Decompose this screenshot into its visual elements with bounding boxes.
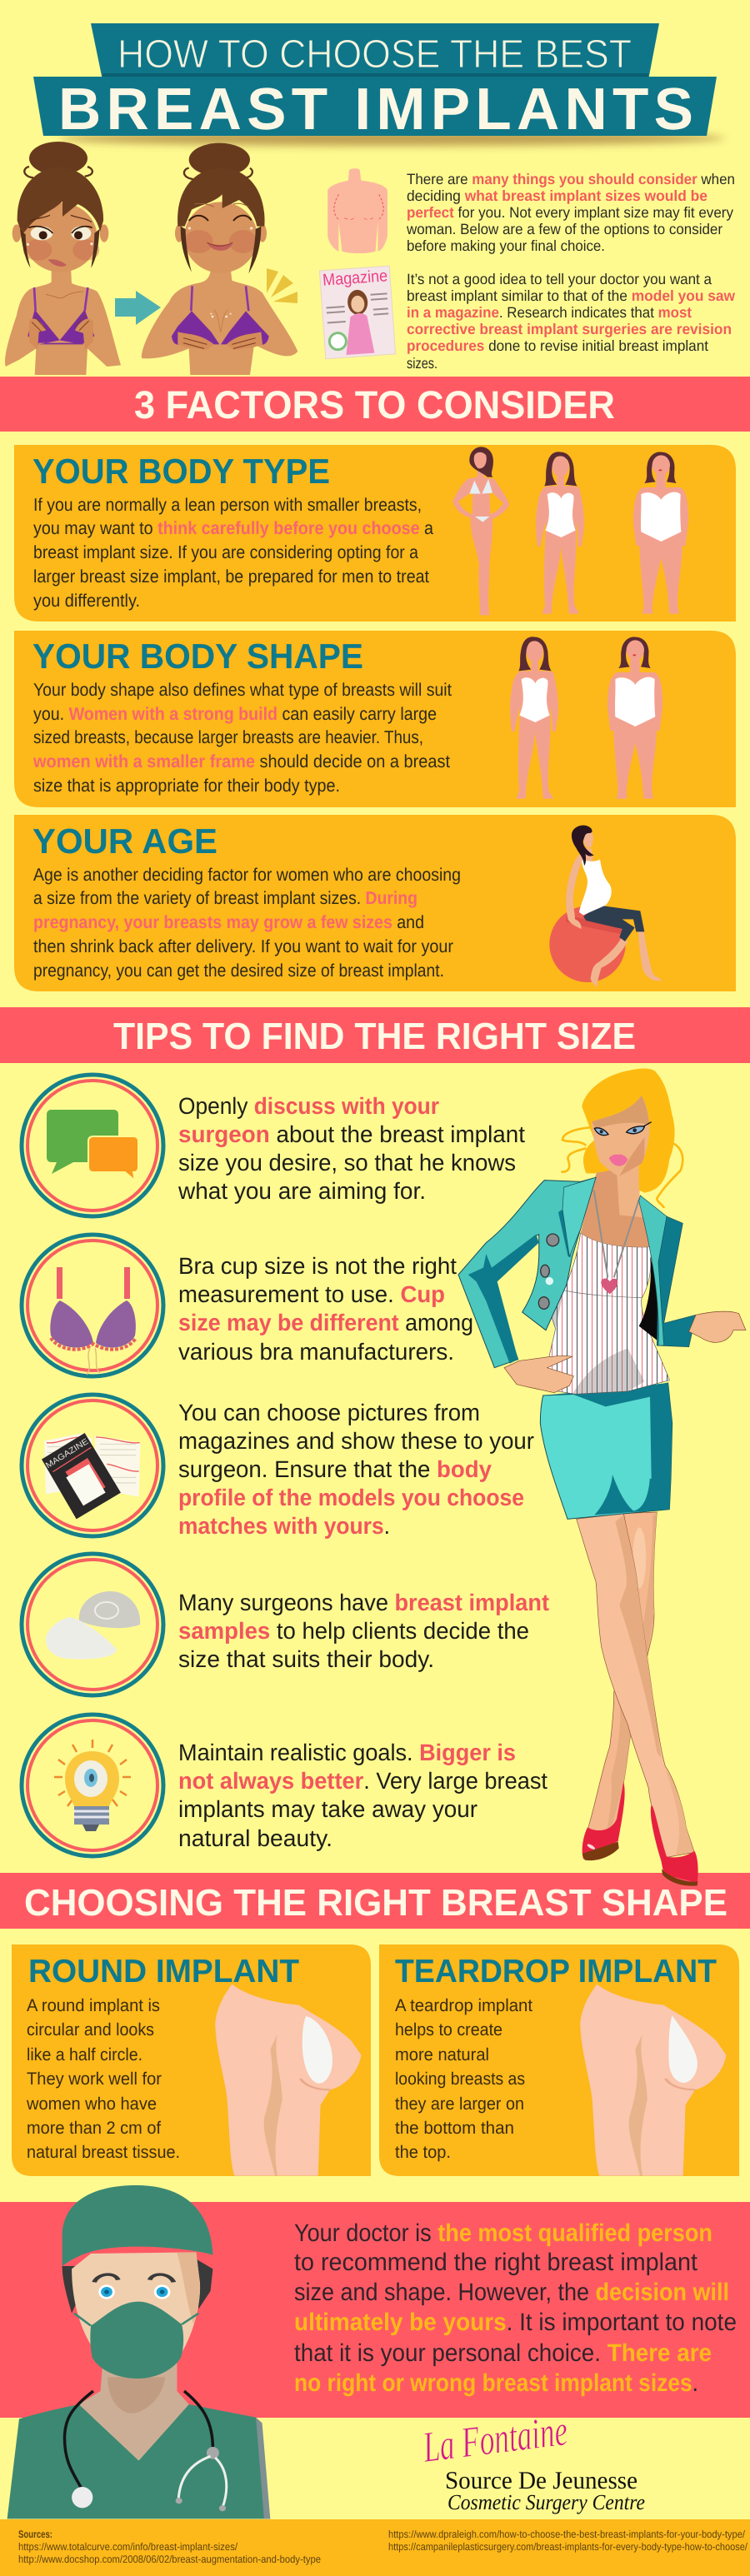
sources left: http://www.docshop.com/2008/06/02/breast-augmentation-and-body-type	[18, 2554, 321, 2565]
tip text: not always better. Very large breast	[178, 1768, 548, 1794]
intro text: sizes.	[407, 355, 438, 372]
intro text	[406, 171, 736, 372]
body text: size that is appropriate for their body type.	[33, 776, 340, 796]
tip text	[178, 1400, 534, 1539]
illustration: torso with round implant	[215, 1984, 361, 2176]
title banner	[33, 23, 725, 146]
tip text: samples to help clients decide the	[178, 1618, 529, 1644]
tip text: size you desire, so that he knows	[178, 1150, 516, 1176]
icon: torso with implant incisions	[328, 168, 388, 253]
closing text: Your doctor is the most qualified person	[294, 2219, 712, 2247]
closing band	[0, 2202, 750, 2418]
panel: round implant	[12, 1944, 371, 2176]
tip text	[178, 1093, 525, 1204]
skirt	[540, 1383, 672, 1519]
body text	[33, 495, 433, 611]
intro text: There are many things you should consider when	[407, 171, 735, 187]
body text	[32, 680, 452, 796]
body text: you may want to think carefully before you choose a	[33, 518, 433, 538]
tip 5: realistic goals	[22, 1715, 548, 1856]
body text: they are larger on	[395, 2094, 524, 2114]
heading: TEARDROP IMPLANT	[395, 1954, 717, 1989]
body text: women with a smaller frame should decide on a breast	[32, 751, 450, 771]
panel: teardrop implant	[379, 1944, 739, 2176]
figure: larger shape	[608, 637, 662, 799]
body text: circular and looks	[27, 2020, 154, 2039]
tip text: Openly discuss with your	[178, 1093, 439, 1119]
body text	[26, 1996, 180, 2162]
heading: YOUR BODY SHAPE	[32, 637, 363, 676]
icon: bra	[22, 1235, 163, 1376]
title line 1: HOW TO CHOOSE THE BEST	[118, 32, 632, 77]
intro text: perfect for you. Not every implant size may fit every	[407, 204, 733, 221]
body text	[33, 865, 461, 981]
tip text: Many surgeons have breast implant	[178, 1590, 549, 1615]
body text: women who have	[26, 2094, 157, 2114]
intro text: procedures done to revise initial breast implant	[407, 337, 708, 354]
intro text: breast implant similar to that of the model you saw	[407, 287, 736, 304]
jacket	[458, 1177, 696, 1368]
heading: YOUR AGE	[32, 821, 218, 861]
surgical cap	[62, 2185, 212, 2266]
tip text: surgeon about the breast implant	[178, 1121, 525, 1147]
closing text: to recommend the right breast implant	[294, 2249, 698, 2276]
tip text	[178, 1740, 548, 1851]
illustration: worried woman before	[5, 142, 121, 375]
tip text: magazines and show these to your	[178, 1428, 534, 1454]
legs and shoes	[577, 1512, 698, 1886]
figures: three body types	[452, 447, 688, 615]
figure: average swimsuit	[536, 452, 584, 614]
illustration: torso with teardrop implant	[580, 1984, 726, 2176]
body text: natural breast tissue.	[27, 2143, 180, 2162]
panel: your body type	[14, 445, 736, 622]
face	[592, 1096, 649, 1176]
body text: pregnancy, your breasts may grow a few sizes and	[33, 912, 424, 932]
surgical mask	[74, 2302, 198, 2379]
necklace and pendant	[594, 1190, 639, 1294]
icon: light bulb	[22, 1715, 163, 1856]
body text: more natural	[395, 2045, 489, 2064]
icon: implant samples	[22, 1554, 163, 1695]
signature: La Fontaine	[420, 2407, 570, 2472]
eyebrows and eyes	[94, 2274, 173, 2299]
band heading: 3 FACTORS TO CONSIDER	[134, 382, 615, 427]
figure: average shape	[510, 637, 558, 799]
heading: YOUR BODY TYPE	[32, 452, 330, 491]
striped top	[548, 1233, 669, 1394]
logo: La Fontaine	[420, 2407, 645, 2514]
intro text: corrective breast implant surgeries are revision	[407, 321, 732, 337]
hands	[504, 1311, 746, 1393]
intro text: woman. Below are a few of the options to consider	[406, 221, 722, 237]
body text: They work well for	[27, 2069, 162, 2089]
body text: you differently.	[33, 591, 140, 611]
icon: magazine cover	[319, 266, 396, 359]
tip text: profile of the models you choose	[178, 1485, 524, 1510]
body text: helps to create	[395, 2020, 502, 2039]
sources left	[18, 2529, 321, 2565]
neck and chest	[581, 1160, 651, 1247]
illustration: blonde woman in teal suit	[458, 1068, 746, 1886]
tip text: matches with yours.	[178, 1513, 390, 1539]
lips	[609, 1155, 628, 1166]
icon: excitement burst	[267, 268, 298, 303]
body text: Age is another deciding factor for women who are choosing	[33, 865, 461, 885]
panel: your body shape	[14, 631, 736, 807]
body text: you. Women with a strong build can easily carry large	[33, 704, 437, 724]
body text: If you are normally a lean person with smaller breasts,	[33, 495, 422, 515]
illustration: pregnant woman on exercise ball	[549, 826, 662, 987]
eyes	[594, 1122, 652, 1136]
panel: your age	[14, 815, 736, 991]
body text: larger breast size implant, be prepared for men to treat	[33, 567, 429, 587]
tip text: You can choose pictures from	[178, 1400, 480, 1425]
body text: a size from the variety of breast implant sizes. During	[33, 888, 418, 908]
band heading: TIPS TO FIND THE RIGHT SIZE	[113, 1015, 636, 1057]
closing text: ultimately be yours. It is important to note	[294, 2309, 737, 2336]
tip text: Maintain realistic goals. Bigger is	[178, 1740, 516, 1765]
logo tagline: Cosmetic Surgery Centre	[448, 2490, 645, 2514]
banner: bottom ribbon	[33, 77, 717, 136]
hair curls	[561, 1127, 682, 1208]
arrow: before to after	[115, 291, 161, 325]
intro text: before making your final choice.	[407, 237, 605, 254]
icon: magazine	[22, 1395, 163, 1536]
body text: A round implant is	[27, 1996, 160, 2015]
tip text: surgeon. Ensure that the body	[178, 1456, 492, 1482]
body text: Your body shape also defines what type of breasts will suit	[33, 680, 452, 700]
tip text: measurement to use. Cup	[178, 1281, 445, 1307]
tip text	[178, 1253, 473, 1365]
closing text: no right or wrong breast implant sizes.	[294, 2369, 698, 2397]
sources right	[388, 2529, 748, 2553]
tip 2: bra cup size	[22, 1235, 473, 1376]
banner: top ribbon	[91, 23, 659, 80]
icon: speech bubbles	[22, 1075, 163, 1216]
section band: breast shape	[0, 1873, 750, 1929]
tip 1: discuss with surgeon	[22, 1075, 525, 1216]
figure: slim bikini	[452, 447, 509, 615]
tip text	[178, 1590, 549, 1672]
tip text: size that suits their body.	[178, 1646, 434, 1672]
body text: like a half circle.	[27, 2045, 142, 2064]
body text: breast implant size. If you are considering opting for a	[33, 542, 418, 562]
body text: sized breasts, because larger breasts are heavier. Thus,	[33, 727, 423, 747]
tip text: various bra manufacturers.	[178, 1339, 454, 1365]
figures: two body shapes	[510, 637, 662, 799]
intro text: in a magazine. Research indicates that most	[407, 304, 692, 321]
intro text: deciding what breast implant sizes would be	[407, 187, 708, 204]
body text: pregnancy, you can get the desired size of breast implant.	[33, 961, 444, 981]
tip text: Bra cup size is not the right	[178, 1253, 457, 1279]
stethoscope	[64, 2391, 227, 2511]
body text: more than 2 cm of	[27, 2119, 161, 2138]
tip 4: implant samples	[22, 1554, 549, 1695]
tip 3: magazine pictures	[22, 1395, 534, 1539]
body text: then shrink back after delivery. If you want to wait for your	[33, 936, 453, 956]
body text: A teardrop implant	[395, 1996, 532, 2015]
closing text: that it is your personal choice. There are	[294, 2339, 712, 2367]
hair back	[582, 1068, 675, 1193]
illustration: happy woman after	[142, 143, 298, 375]
illustration: surgeon in mask	[8, 2185, 270, 2519]
sources left: https://www.totalcurve.com/info/breast-implant-sizes/	[18, 2541, 238, 2553]
tip text: what you are aiming for.	[178, 1178, 426, 1204]
tip text: implants may take away your	[178, 1796, 478, 1822]
section band: 3 factors	[0, 377, 750, 432]
magazine title: Magazine	[322, 267, 388, 290]
body text: the top.	[395, 2143, 451, 2162]
logo name: Source De Jeunesse	[445, 2467, 638, 2494]
tip text: natural beauty.	[178, 1825, 332, 1851]
section band: tips	[0, 1007, 750, 1063]
intro text: It’s not a good idea to tell your doctor you want a	[407, 271, 712, 287]
tip text: size may be different among	[178, 1310, 473, 1335]
body text	[395, 1996, 532, 2162]
figure: larger swimsuit	[633, 452, 688, 614]
closing text: size and shape. However, the decision will	[294, 2279, 729, 2306]
magazine label: MAGAZINE	[44, 1436, 90, 1470]
body text: looking breasts as	[395, 2069, 525, 2089]
body text: the bottom than	[395, 2119, 514, 2138]
sources footer	[0, 2519, 750, 2576]
band heading: CHOOSING THE RIGHT BREAST SHAPE	[24, 1881, 728, 1924]
heading: ROUND IMPLANT	[28, 1954, 299, 1989]
closing text	[294, 2219, 737, 2397]
sources left: Sources:	[18, 2529, 52, 2540]
title line 2: BREAST IMPLANTS	[58, 77, 693, 142]
